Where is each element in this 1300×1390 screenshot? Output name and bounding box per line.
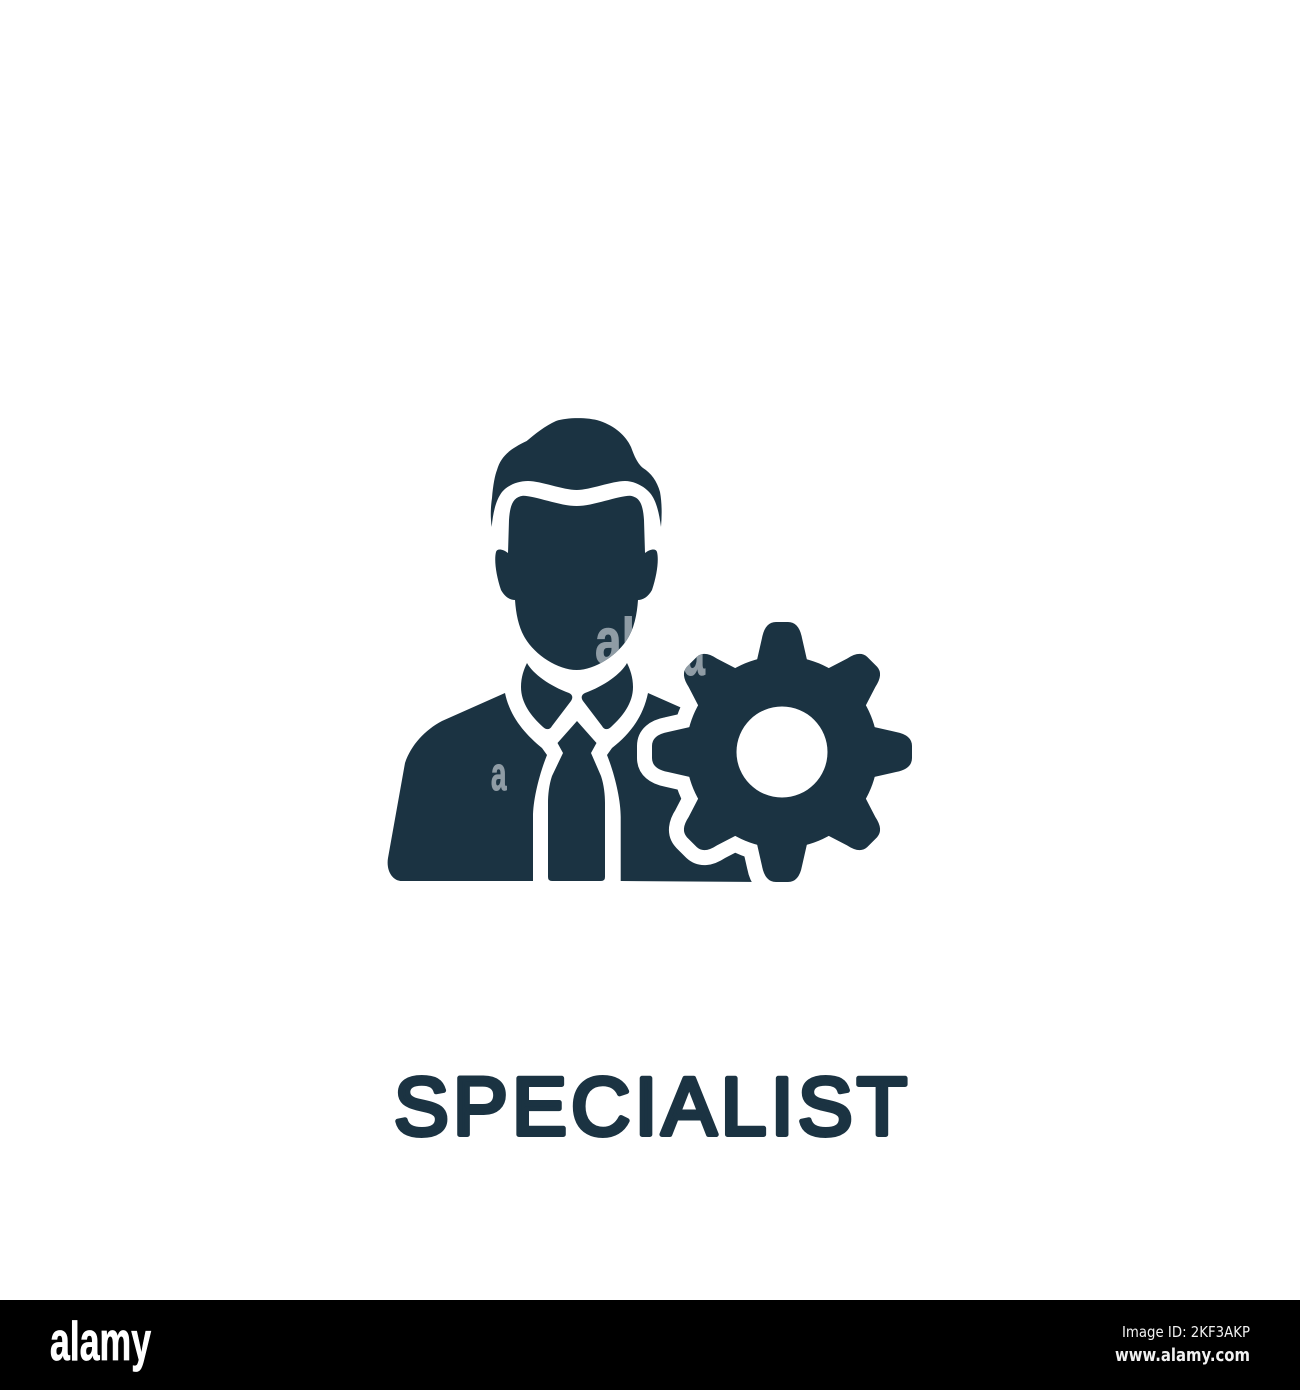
icon: necktie <box>548 721 605 881</box>
icon: face and ears <box>495 496 658 670</box>
logo: alamy: alamy <box>50 1310 151 1372</box>
icon: gear <box>652 622 912 882</box>
footer bar <box>0 1300 1300 1390</box>
icon: hair <box>491 418 662 527</box>
watermark on face: al <box>595 605 635 677</box>
website: www.alamy.com <box>1115 1345 1250 1366</box>
icon: specialist person with gear <box>388 418 912 882</box>
icon: right collar <box>582 663 633 729</box>
gear cut-out halo <box>652 622 912 882</box>
image id: Image ID: 2KF3AKP <box>1122 1323 1250 1341</box>
icon: jacket right side <box>607 693 770 882</box>
icon: gear centre hole <box>736 706 828 798</box>
icon: jacket left side <box>388 693 547 881</box>
watermark on jacket: a <box>491 747 507 800</box>
watermark on gear: a <box>683 611 706 691</box>
title: SPECIALIST <box>394 1062 907 1152</box>
icon: left collar <box>521 663 572 729</box>
